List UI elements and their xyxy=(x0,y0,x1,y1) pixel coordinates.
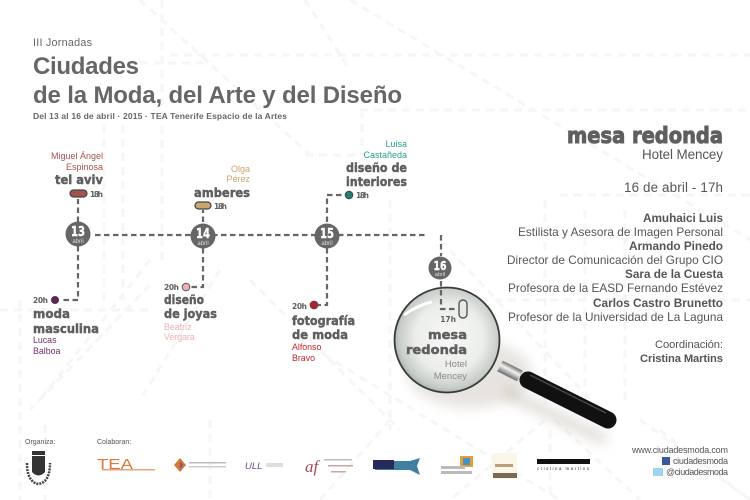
talk: fotografía de moda: Bravo xyxy=(292,353,315,363)
stop: 14 abril: abril xyxy=(197,241,209,247)
venue and date: 16 de abril - 17h xyxy=(624,180,723,195)
talk: tel aviv: Miguel Ángel xyxy=(51,151,103,161)
talk: moda masculina: Balboa xyxy=(33,346,60,356)
organizer label: Organiza: xyxy=(25,439,55,446)
talk inside lens: mesa redonda: redonda xyxy=(406,343,467,357)
talk: tel aviv: 18h xyxy=(90,190,103,199)
speakers list: Sara de la Cuesta xyxy=(625,267,723,281)
talk: diseño de joyas: Vergara xyxy=(164,332,195,342)
talk: amberes: Olga xyxy=(231,164,250,174)
speakers list: Armando Pinedo xyxy=(629,239,723,253)
title xyxy=(33,53,402,109)
talk: tel aviv xyxy=(51,151,103,199)
logo: ULL xyxy=(245,461,283,472)
venue and date: Hotel Mencey xyxy=(642,147,723,162)
logo: TEA xyxy=(97,456,155,473)
title: de la Moda, del Arte y del Diseño xyxy=(33,82,402,109)
timeline route xyxy=(60,195,441,305)
talk: diseño de interiores: diseño de xyxy=(346,161,407,175)
venue and date xyxy=(624,147,723,195)
stop: 13 abril xyxy=(66,222,90,246)
talk: fotografía de moda: Alfonso xyxy=(292,342,321,352)
talk: diseño de joyas: 20h xyxy=(164,283,179,292)
talk: amberes: Pérez xyxy=(226,174,250,184)
logo: Hotel Mencey xyxy=(492,453,517,479)
talk: diseño de interiores: Luisa xyxy=(385,139,407,149)
talk: fotografía de moda: fotografía xyxy=(292,314,355,328)
facebook link: ciudadesmoda xyxy=(673,456,728,466)
twitter link: @ciudadesmoda xyxy=(666,467,728,477)
talk: moda masculina: 20h xyxy=(33,296,48,305)
icon: magnifying glass xyxy=(394,288,608,440)
web link: www.ciudadesmoda.com xyxy=(631,445,728,455)
talk inside lens: mesa redonda: Mencey xyxy=(434,371,467,382)
speakers list: Amuhaici Luis xyxy=(643,211,723,225)
talk: amberes xyxy=(194,164,250,211)
talk: diseño de interiores: interiores xyxy=(346,175,407,189)
stop: 13 abril: abril xyxy=(72,239,84,245)
talk: moda masculina: Lucas xyxy=(33,335,57,345)
talk: fotografía de moda: 20h xyxy=(292,302,307,311)
title: Ciudades xyxy=(33,53,139,80)
logo: Cristina Martins xyxy=(537,459,590,471)
stop: 14 abril xyxy=(190,224,216,248)
speakers list: Profesor de la Universidad de La Laguna xyxy=(508,310,723,324)
talk: diseño de joyas: Beatriz xyxy=(164,322,191,332)
stop: 15 abril: abril xyxy=(321,241,333,247)
talk: amberes: amberes xyxy=(194,186,250,200)
talk: fotografía de moda xyxy=(292,301,355,363)
speakers list xyxy=(507,211,723,324)
stop: 16 abril: 16 xyxy=(434,259,446,273)
speakers list: Carlos Castro Brunetto xyxy=(593,296,723,310)
logo: Alliance Française: af xyxy=(305,457,320,476)
talk: fotografía de moda: de moda xyxy=(292,328,348,342)
coordination: Cristina Martins xyxy=(640,353,723,365)
heading: mesa redonda: mesa redonda xyxy=(567,124,723,149)
stop: 15 abril xyxy=(314,224,340,248)
stop: 13 abril: 13 xyxy=(71,225,85,240)
talk: diseño de interiores xyxy=(345,139,407,200)
logo: fish xyxy=(373,458,420,475)
logo: Cristina Martins: cristina martins xyxy=(537,466,590,471)
talk: amberes: 18h xyxy=(214,202,227,211)
collaborators label: Colaboran: xyxy=(97,439,131,446)
stop: 15 abril: 15 xyxy=(320,227,334,242)
stop: 14 abril: 14 xyxy=(196,227,210,242)
logo: Grafi Express xyxy=(441,456,473,474)
talk inside lens: mesa redonda: Hotel xyxy=(445,359,467,370)
speakers list: Director de Comunicación del Grupo CIO xyxy=(507,253,723,267)
stop: 16 abril xyxy=(428,256,452,280)
talk: diseño de interiores: Castañeda xyxy=(363,150,407,160)
logo: Cabildo de Tenerife xyxy=(27,451,50,484)
talk: tel aviv: Espinosa xyxy=(66,162,103,172)
talk: diseño de interiores: 18h xyxy=(356,191,369,200)
talk inside lens: mesa redonda xyxy=(406,281,467,382)
talk: moda masculina xyxy=(33,296,99,356)
talk: diseño de joyas: de joyas xyxy=(164,307,217,321)
logo: TEA: TEA xyxy=(97,456,133,473)
talk inside lens: mesa redonda: mesa xyxy=(428,328,467,342)
date and venue: Del 13 al 16 de abril · 2015 · TEA Tenerife Espacio de la Artes xyxy=(33,111,287,121)
talk: moda masculina: masculina xyxy=(33,322,99,336)
coordination: Coordinación: xyxy=(655,339,723,351)
talk: moda masculina: moda xyxy=(33,307,70,321)
logo: ULL: ULL xyxy=(245,461,262,472)
logo: Alliance Française xyxy=(305,457,353,476)
logo: Fundación General xyxy=(174,458,226,472)
stop: 16 abril: abril xyxy=(435,272,445,278)
talk: diseño de joyas xyxy=(164,283,217,342)
coordination xyxy=(640,339,723,365)
talk: diseño de joyas: diseño xyxy=(164,293,204,307)
talk inside lens: mesa redonda: 17h xyxy=(440,315,456,324)
speakers list: Estilista y Asesora de Imagen Personal xyxy=(518,225,723,239)
speakers list: Profesora de la EASD Fernando Estévez xyxy=(508,281,723,295)
event label: III Jornadas xyxy=(33,37,93,49)
talk: tel aviv: tel aviv xyxy=(55,173,103,187)
